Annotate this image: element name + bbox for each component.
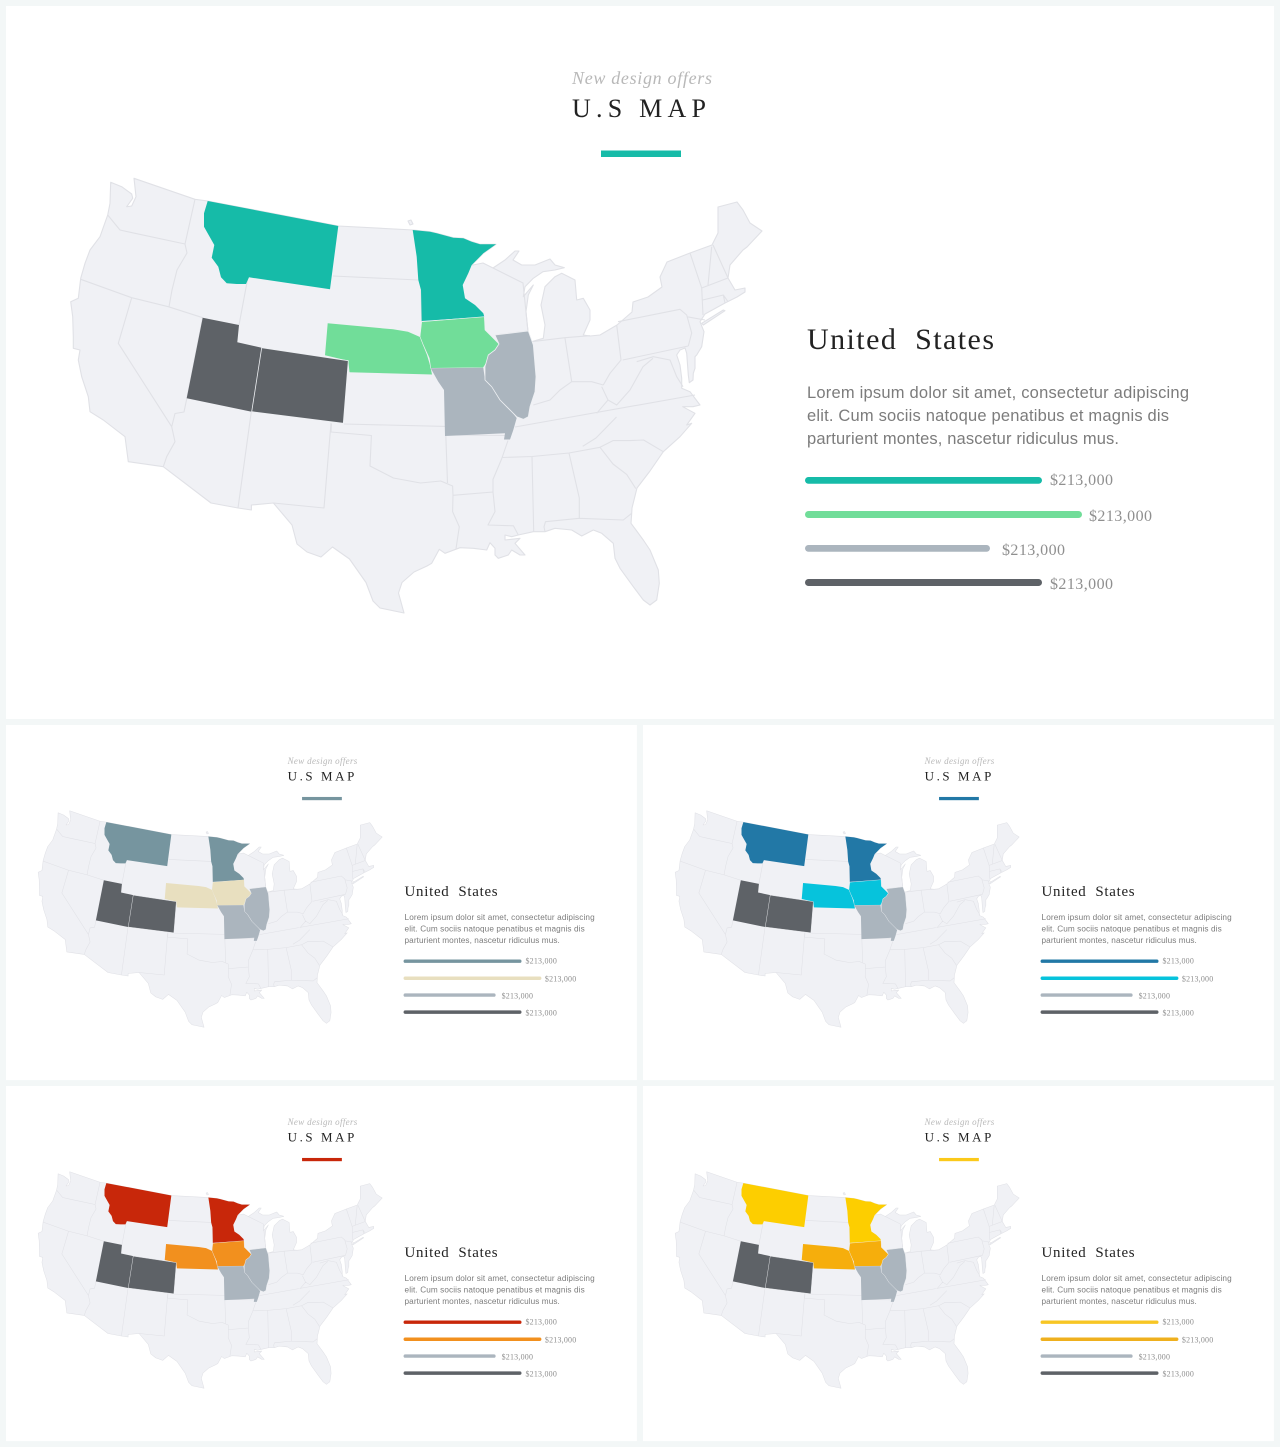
panel: red and orange variant bbox=[6, 1086, 637, 1441]
bar chart: $213,000 bbox=[1162, 957, 1194, 966]
title: U.S MAP bbox=[288, 768, 354, 783]
bar chart: $213,000 bbox=[525, 1008, 557, 1017]
bar chart: $213,000 bbox=[1162, 1008, 1194, 1017]
US map bbox=[675, 1172, 1019, 1388]
bar chart: $213,000 bbox=[525, 957, 557, 966]
title accent bar bbox=[302, 1158, 342, 1161]
title: U.S MAP bbox=[925, 1129, 991, 1144]
bar chart: $213,000 bbox=[1002, 542, 1065, 559]
heading: United States: United States bbox=[1042, 1245, 1135, 1261]
title accent bar bbox=[939, 1158, 979, 1161]
body text bbox=[807, 384, 1189, 448]
body text: parturient montes, nascetur ridiculus mus. bbox=[405, 1297, 560, 1306]
title accent bar bbox=[601, 150, 681, 157]
US map bbox=[38, 811, 382, 1027]
bar chart bbox=[404, 957, 576, 1017]
bar chart: $213,000 bbox=[545, 1335, 576, 1344]
bar chart: $213,000 bbox=[525, 1318, 557, 1327]
title: U.S MAP bbox=[288, 1129, 354, 1144]
heading: United States: United States bbox=[405, 884, 498, 900]
US map bbox=[71, 178, 762, 613]
title: U.S MAP bbox=[572, 94, 706, 123]
body text: parturient montes, nascetur ridiculus mus. bbox=[405, 936, 560, 945]
title accent bar bbox=[939, 797, 979, 800]
body text bbox=[405, 1274, 595, 1306]
subtitle: New design offers bbox=[287, 1117, 358, 1127]
bar chart: $213,000 bbox=[1139, 1352, 1170, 1361]
bar chart: $213,000 bbox=[1162, 1318, 1194, 1327]
body text: Lorem ipsum dolor sit amet, consectetur adipiscing bbox=[405, 913, 595, 922]
bar chart: $213,000 bbox=[1162, 1369, 1194, 1378]
bar chart: $213,000 bbox=[1182, 1335, 1213, 1344]
panel: main slide teal green bbox=[6, 6, 1274, 719]
body text: parturient montes, nascetur ridiculus mus. bbox=[1042, 936, 1197, 945]
bar chart: $213,000 bbox=[525, 1369, 557, 1378]
bar chart: $213,000 bbox=[1050, 472, 1113, 489]
heading: United States: United States bbox=[807, 323, 994, 356]
body text: parturient montes, nascetur ridiculus mus. bbox=[807, 430, 1119, 448]
body text: elit. Cum sociis natoque penatibus et magnis dis bbox=[405, 1286, 585, 1295]
body text: Lorem ipsum dolor sit amet, consectetur adipiscing bbox=[1042, 913, 1232, 922]
body text: elit. Cum sociis natoque penatibus et magnis dis bbox=[1042, 925, 1222, 934]
heading: United States: United States bbox=[405, 1245, 498, 1261]
body text: elit. Cum sociis natoque penatibus et magnis dis bbox=[405, 925, 585, 934]
body text: parturient montes, nascetur ridiculus mus. bbox=[1042, 1297, 1197, 1306]
panel: blue and cyan variant bbox=[643, 725, 1274, 1080]
body text bbox=[1042, 1274, 1232, 1306]
title: U.S MAP bbox=[925, 768, 991, 783]
bar chart bbox=[404, 1318, 576, 1378]
body text: Lorem ipsum dolor sit amet, consectetur adipiscing bbox=[405, 1274, 595, 1283]
body text: Lorem ipsum dolor sit amet, consectetur adipiscing bbox=[807, 384, 1189, 402]
US map bbox=[675, 811, 1019, 1027]
body text bbox=[405, 913, 595, 945]
bar chart: $213,000 bbox=[1050, 576, 1113, 593]
US map bbox=[38, 1172, 382, 1388]
bar chart: $213,000 bbox=[1139, 991, 1170, 1000]
subtitle: New design offers bbox=[571, 68, 712, 88]
body text: elit. Cum sociis natoque penatibus et magnis dis bbox=[1042, 1286, 1222, 1295]
bar chart: $213,000 bbox=[1089, 508, 1152, 525]
bar chart bbox=[805, 472, 1152, 593]
bar chart: $213,000 bbox=[502, 1352, 533, 1361]
heading: United States: United States bbox=[1042, 884, 1135, 900]
body text bbox=[1042, 913, 1232, 945]
subtitle: New design offers bbox=[924, 756, 995, 766]
bar chart bbox=[1041, 1318, 1213, 1378]
title accent bar bbox=[302, 797, 342, 800]
bar chart: $213,000 bbox=[1182, 974, 1213, 983]
panel: slate and beige variant bbox=[6, 725, 637, 1080]
subtitle: New design offers bbox=[924, 1117, 995, 1127]
bar chart: $213,000 bbox=[502, 991, 533, 1000]
body text: Lorem ipsum dolor sit amet, consectetur adipiscing bbox=[1042, 1274, 1232, 1283]
panel: yellow and amber variant bbox=[643, 1086, 1274, 1441]
bar chart: $213,000 bbox=[545, 974, 576, 983]
body text: elit. Cum sociis natoque penatibus et magnis dis bbox=[807, 407, 1169, 425]
bar chart bbox=[1041, 957, 1213, 1017]
subtitle: New design offers bbox=[287, 756, 358, 766]
